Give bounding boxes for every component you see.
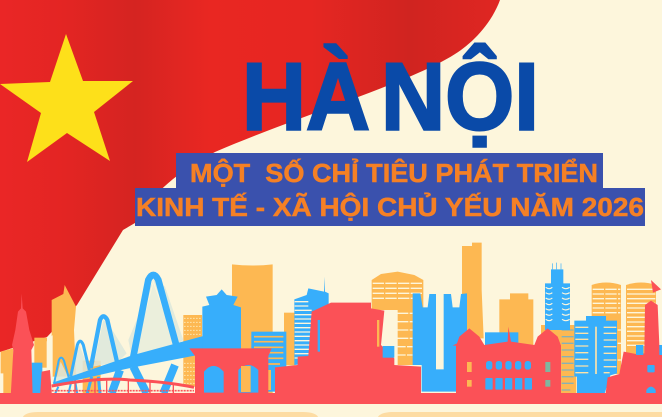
cream patch under flag [47, 335, 53, 377]
gate arch left [204, 366, 224, 393]
blue tower with balconies [545, 263, 570, 330]
flag [0, 0, 500, 352]
title: HÀ [242, 44, 370, 150]
red pagoda [11, 293, 34, 397]
card top left [23, 412, 318, 417]
blue office block [574, 316, 617, 395]
card top right [378, 412, 662, 417]
red palace [453, 327, 561, 397]
red flag tower [604, 280, 662, 404]
title [242, 42, 539, 150]
blue towers left [32, 277, 329, 396]
stripes on orange mid tower [562, 330, 574, 390]
blue bridge [54, 275, 177, 394]
bridge cables [55, 280, 183, 383]
orange buildings right [372, 243, 656, 394]
red stub tower [40, 370, 52, 397]
red gate [189, 348, 272, 395]
title: NỘI [381, 42, 539, 150]
subtitle line 1: MỘT SỐ CHỈ TIÊU PHÁT TRIỂN [190, 158, 598, 188]
blue U tower [413, 293, 467, 392]
subtitle line 2: KINH TẾ - XÃ HỘI CHỦ YẾU NĂM 2026 [136, 191, 644, 222]
small flag [651, 280, 661, 293]
red railing [52, 379, 194, 394]
red block right [275, 303, 331, 403]
gate arch right [238, 365, 258, 393]
palace windows [485, 361, 532, 390]
skyline: left half [1, 264, 331, 403]
subtitle banner [135, 153, 645, 226]
red block [331, 303, 421, 404]
skyline: right half [331, 243, 662, 404]
window stripes orange [373, 283, 655, 360]
bridge deck [53, 336, 203, 385]
orange buildings left [1, 264, 295, 397]
icon: yellow star [0, 34, 133, 162]
blue roof behind palace [485, 332, 518, 346]
window stripes [295, 302, 312, 358]
skyline base strip [0, 393, 662, 404]
